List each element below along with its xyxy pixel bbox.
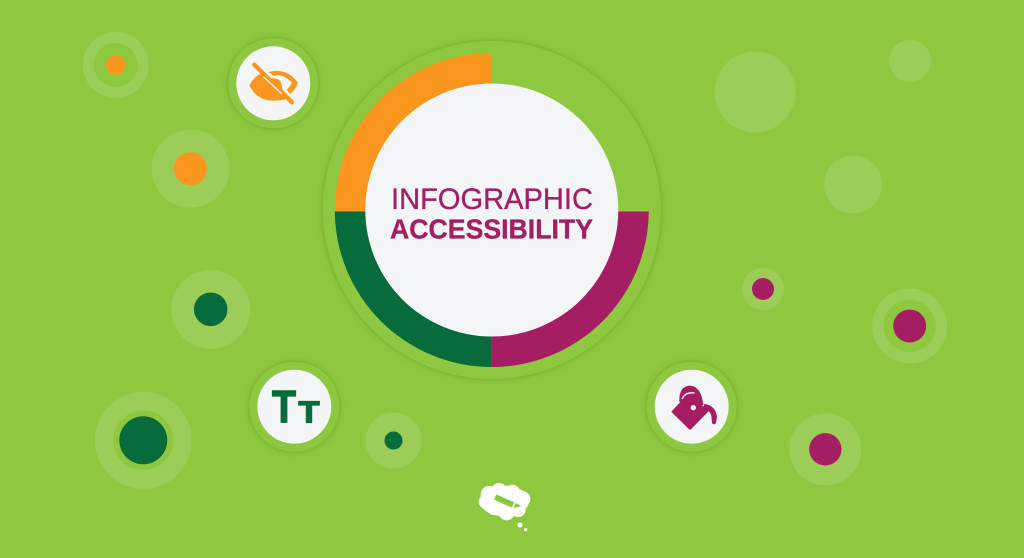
title: INFOGRAPHIC xyxy=(391,183,593,216)
segment: purple xyxy=(492,212,649,367)
dot: green small xyxy=(366,412,422,468)
icon: text size Tt: T xyxy=(298,395,320,430)
title xyxy=(390,183,593,244)
dot: purple small xyxy=(742,268,784,310)
central donut chart xyxy=(323,41,661,379)
dot: orange ringed small xyxy=(83,32,149,98)
dot: green halo xyxy=(171,270,250,349)
centre disc xyxy=(365,84,618,336)
pale decorative circles xyxy=(714,40,931,214)
icon: crossed-out eye xyxy=(228,38,318,128)
logo: brain with pencil and thought bubbles xyxy=(479,483,530,531)
dot: orange halo xyxy=(152,130,230,208)
icon: text size Tt: T xyxy=(272,382,296,433)
dot: green ringed large xyxy=(95,392,192,489)
segment: dark green xyxy=(334,212,492,367)
icon: paint bucket xyxy=(647,362,737,452)
dot: purple ringed xyxy=(872,288,947,364)
dot: purple halo xyxy=(789,413,861,485)
icon: text size Tt xyxy=(249,362,339,452)
title: ACCESSIBILITY xyxy=(390,214,593,244)
segment: orange xyxy=(334,53,492,212)
infographic canvas xyxy=(82,32,948,532)
